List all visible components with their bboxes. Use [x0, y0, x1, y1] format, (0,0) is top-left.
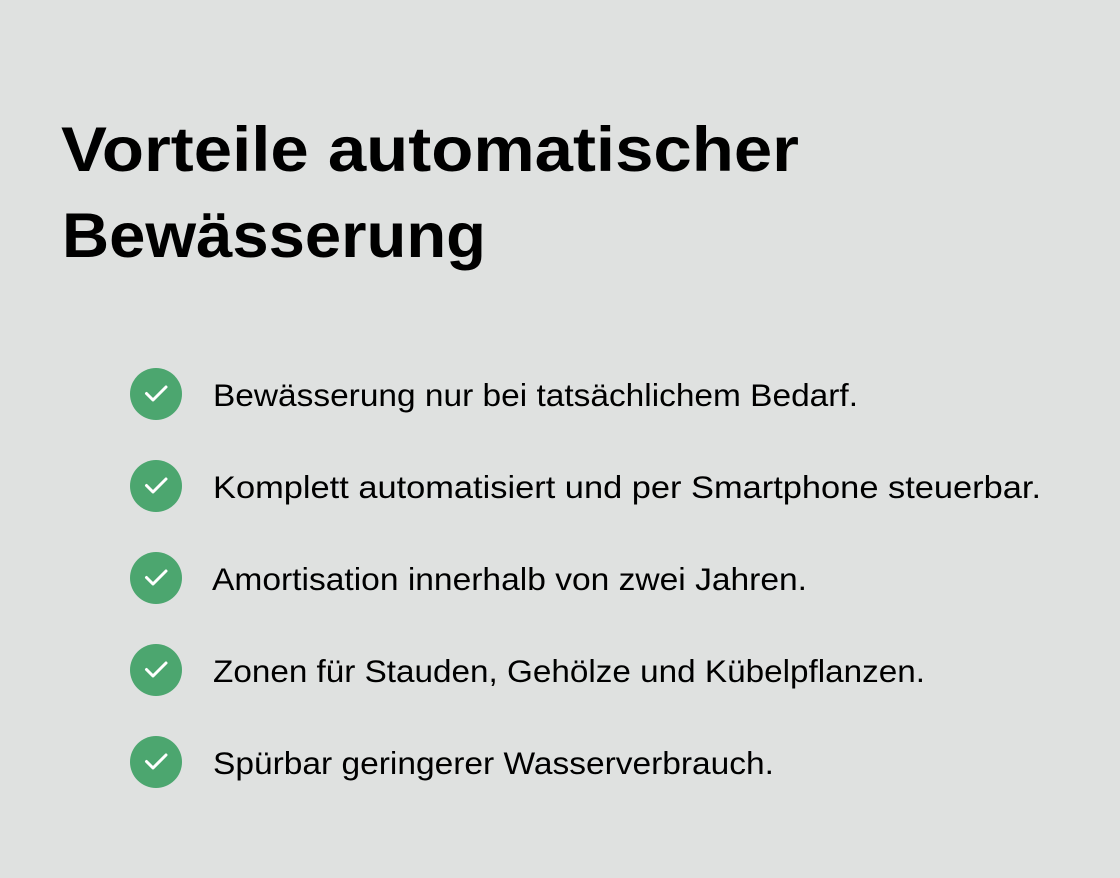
text 2: Komplett automatisiert und per Smartphone steuerbar. — [213, 469, 1041, 505]
text 5: Spürbar geringerer Wasserverbrauch. — [213, 745, 774, 781]
benefit 3 — [130, 552, 807, 604]
icon: green check 4 — [130, 644, 182, 696]
title: Vorteile automatischer — [61, 115, 799, 185]
text 4: Zonen für Stauden, Gehölze und Kübelpflanzen. — [213, 653, 925, 689]
icon: green check 1 — [130, 368, 182, 420]
benefit 1 — [130, 368, 858, 420]
text 3: Amortisation innerhalb von zwei Jahren. — [212, 561, 807, 597]
text 1: Bewässerung nur bei tatsächlichem Bedarf. — [213, 377, 858, 413]
list of benefits — [130, 368, 1041, 788]
benefit 4 — [130, 644, 925, 696]
title — [61, 115, 799, 271]
icon: green check 5 — [130, 736, 182, 788]
benefit 5 — [130, 736, 774, 788]
title: Bewässerung — [62, 201, 486, 271]
icon: green check 3 — [130, 552, 182, 604]
benefit 2 — [130, 460, 1041, 512]
icon: green check 2 — [130, 460, 182, 512]
